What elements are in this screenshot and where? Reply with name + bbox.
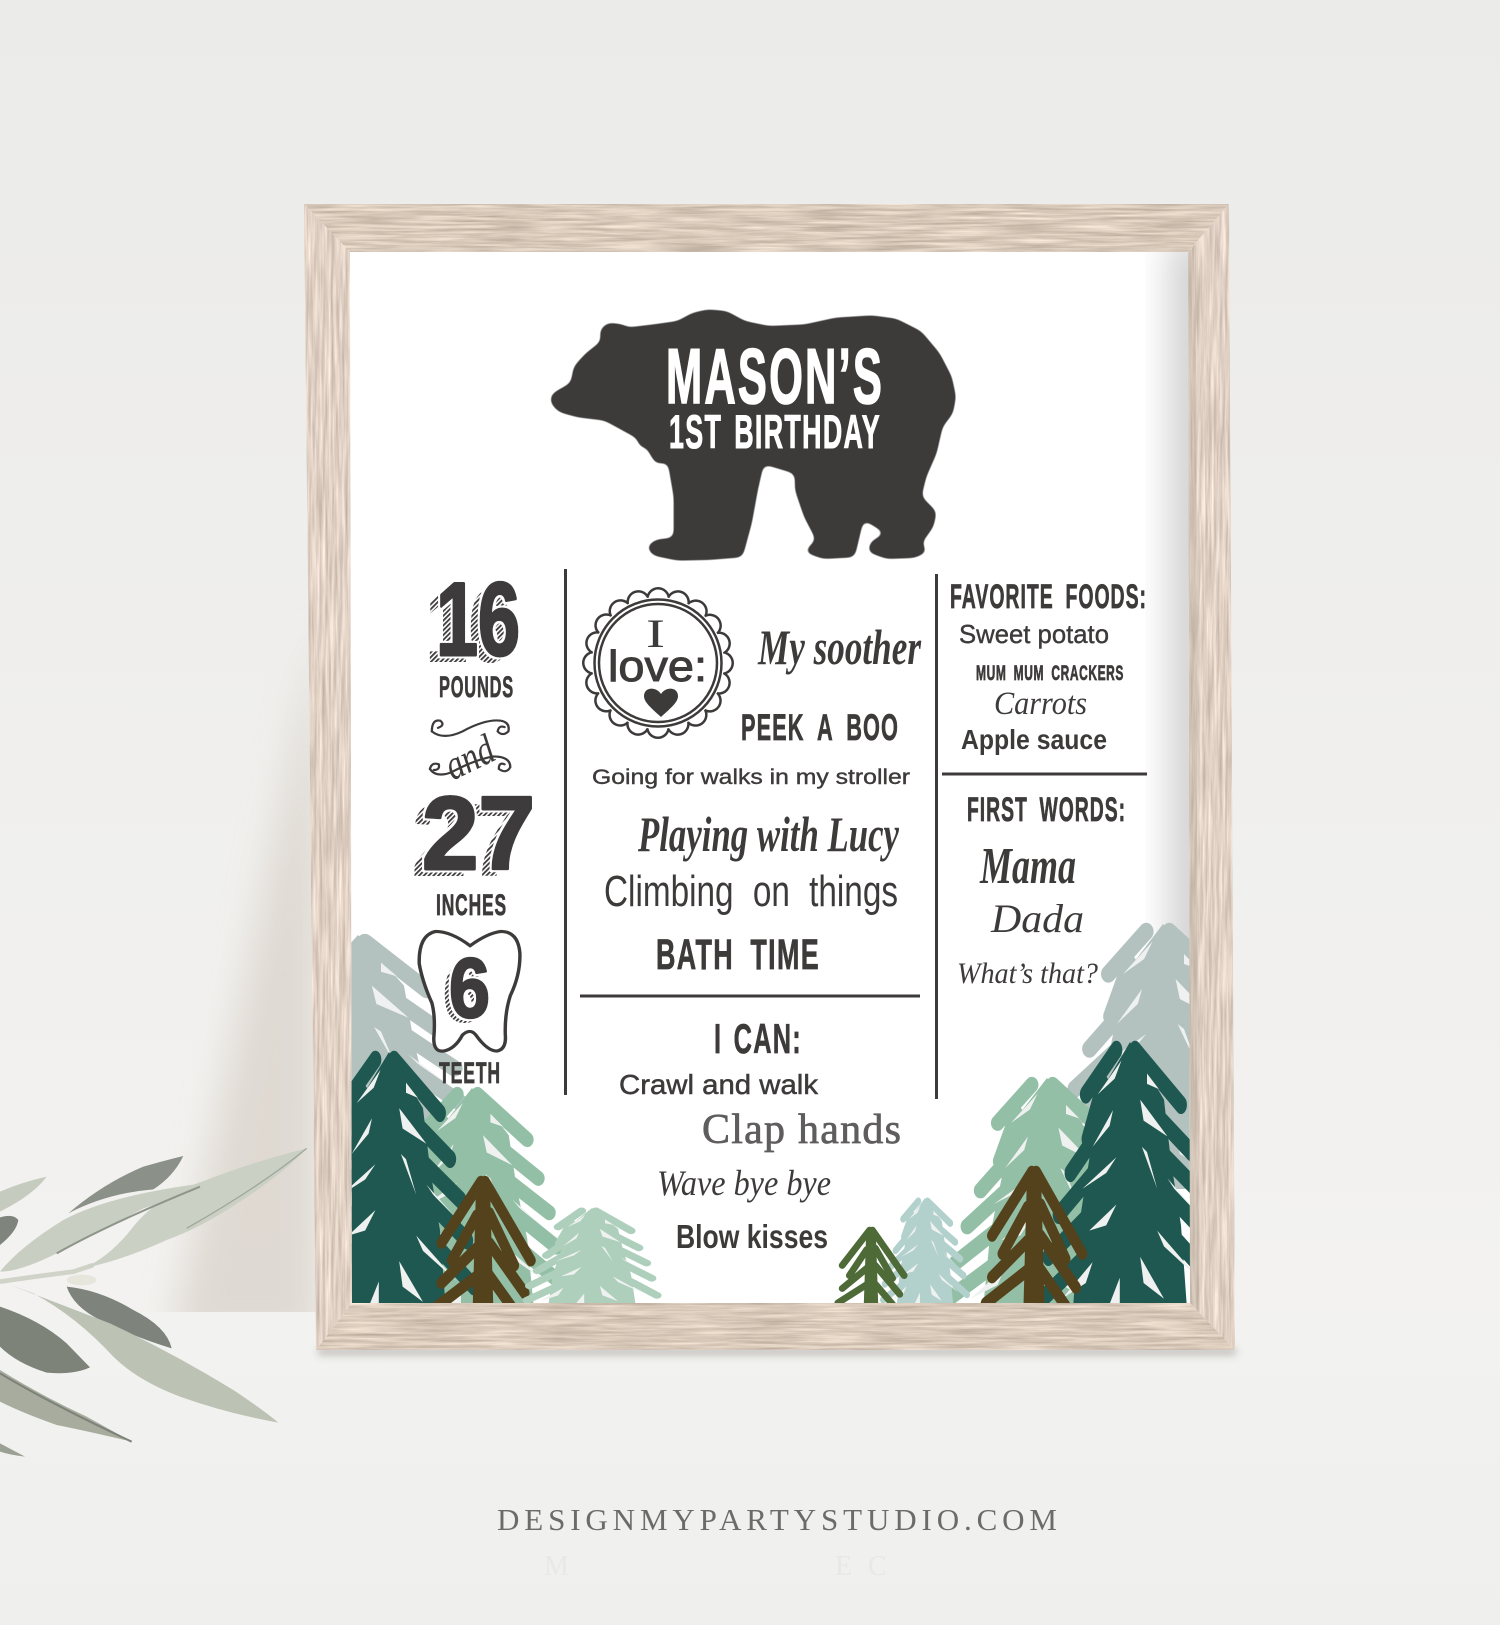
wall warm shadow beside frame [167,686,316,1312]
icon: tooth [419,931,520,1051]
panel: I can [619,1015,901,1255]
stat: 16 pounds: 16 [425,569,511,685]
panel: I love [592,597,921,979]
subtitle: 1st birthday: 1ST BIRTHDAY [669,405,881,458]
list: foods: Carrots [994,686,1087,722]
bear with title [552,310,955,560]
footer: faint reflection: C [868,1551,887,1582]
panel: first words [957,791,1126,990]
stat: 27 inches: INCHES [436,889,507,922]
list: I love items: BATH TIME [656,931,820,979]
title: Mason's: MASON’S [666,332,884,420]
list: I can items: Blow kisses [676,1218,828,1255]
footer: faint reflection: E [835,1551,852,1582]
left pine trees [351,934,662,1303]
badge: I love: I [646,611,665,656]
ornament: and: and [437,726,503,790]
list: words: Mama [979,838,1076,895]
list: I love items: My soother [757,619,921,675]
icon: heart [644,689,678,717]
frame shadow [318,1348,1236,1355]
list: I can items: Clap hands [702,1107,901,1153]
list: I love items: Climbing on things [604,867,898,916]
stat: 6 teeth [419,931,520,1090]
stat: 6 teeth: 6 [449,941,490,1035]
forest illustration [243,924,1268,1322]
heading: first words: FIRST WORDS: [967,791,1126,829]
heading: favorite foods: FAVORITE FOODS: [950,578,1147,616]
stat: 6 teeth: TEETH [439,1057,501,1090]
list: I love items: Going for walks in my stroller [592,766,910,789]
list: foods: Sweet potato [959,619,1109,649]
icon: bear silhouette [552,310,955,560]
list: foods: Apple sauce [961,724,1107,755]
footer: faint reflection: M [544,1551,569,1582]
list: foods [959,619,1124,755]
panel: favorite foods [950,578,1147,755]
stat: 16 pounds: 16 [436,562,520,678]
list: words: What’s that? [957,957,1098,990]
stat: 16 pounds [425,562,520,704]
icon: olive branch [0,1148,307,1457]
list: foods: MUM MUM CRACKERS [976,662,1124,685]
printed sheet [350,240,1220,1303]
list: words: Dada [990,896,1084,941]
badge: I love [592,597,724,729]
wooden frame [300,200,1240,1355]
table surface [0,1312,1500,1625]
list: words [957,838,1098,990]
list: I can items: Crawl and walk [619,1069,819,1100]
footer: faint reflection [544,1551,887,1582]
list: I can items: Wave bye bye [657,1163,831,1203]
list: I love items: Playing with Lucy [637,806,900,862]
footer: studio name: DESIGNMYPARTYSTUDIO.COM [497,1502,1057,1537]
badge: I love: love: [608,642,707,691]
panel: baby stats [411,562,535,1090]
stat: 6 teeth: 6 [442,946,485,1040]
right pine trees [834,922,1190,1303]
stat: 27 inches: 27 [422,776,535,892]
stat: 16 pounds: POUNDS [439,671,514,704]
list: I can items [619,1069,901,1255]
list: I love items [592,619,921,979]
list: I love items: PEEK A BOO [741,707,899,748]
heading: I can: I CAN: [714,1015,802,1062]
divider lines [564,569,1147,1099]
stat: 27 inches: 27 [411,783,524,899]
